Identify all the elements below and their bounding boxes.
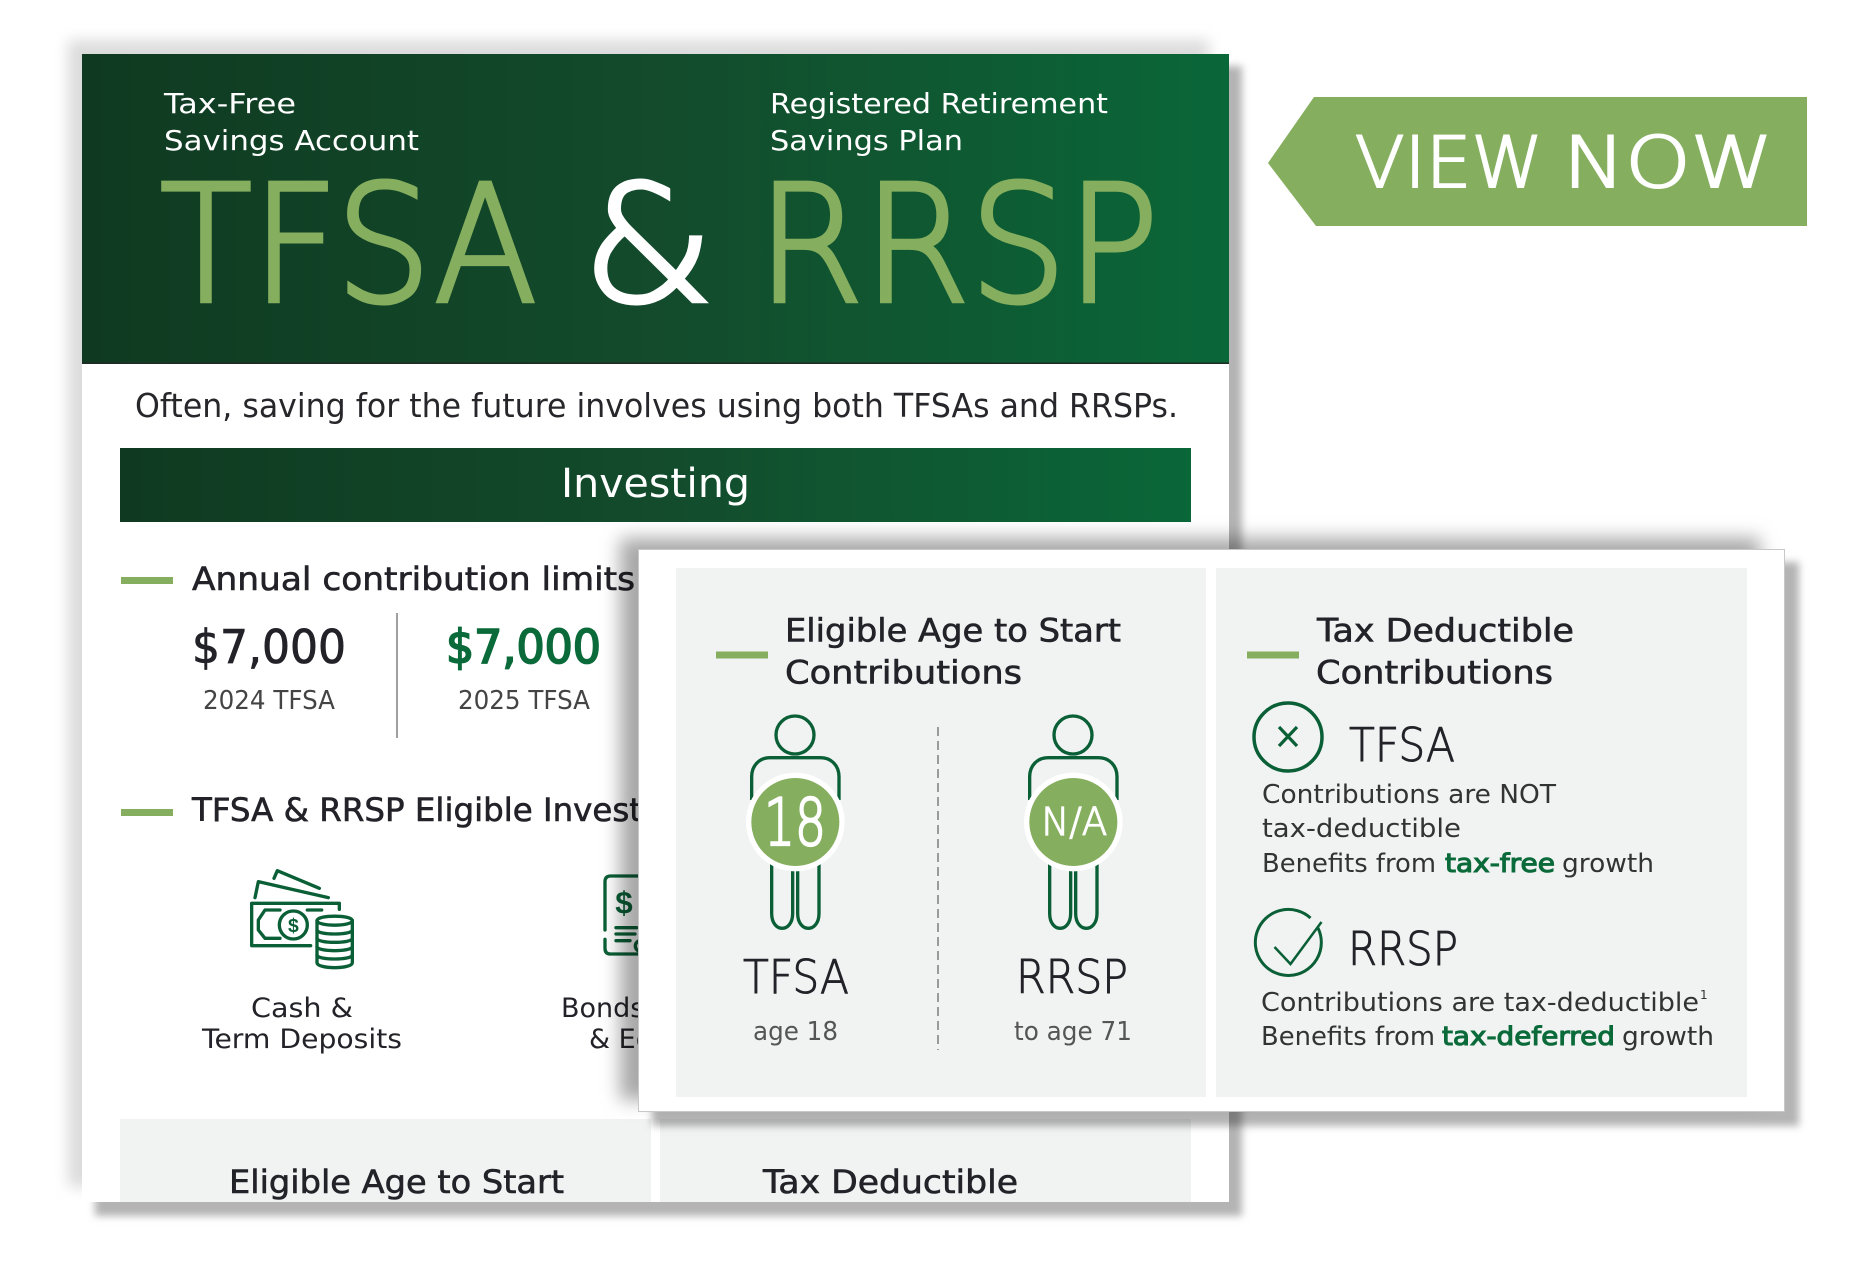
button: VIEW NOW <box>1268 97 1807 226</box>
label: Cash & Term Deposits: Term Deposits <box>201 1024 402 1055</box>
icon: cash and coins: $ <box>288 916 299 937</box>
icon: person with 18 badge <box>746 716 845 928</box>
icon: person with 18 badge: 18 <box>764 786 826 861</box>
subtitle: Tax-Free Savings Account: Tax-Free <box>163 87 296 120</box>
text: TFSA not deductible: tax-free <box>1445 849 1555 879</box>
label: TFSA age 18: age 18 <box>753 1017 838 1047</box>
text: RRSP deductible: Benefits from <box>1261 1022 1435 1052</box>
panel: lower tax deductible strip <box>660 1119 1191 1202</box>
subtitle: Registered Retirement Savings Plan: Registered Retirement <box>770 87 1108 120</box>
subtitle: Registered Retirement Savings Plan: Savings Plan <box>770 124 963 157</box>
panel: enlarged overlay card <box>620 538 1799 1126</box>
text: RRSP deductible: tax-deferred <box>1442 1022 1615 1052</box>
text: TFSA not deductible: growth <box>1562 849 1654 879</box>
panel: lower eligible age strip <box>120 1119 651 1202</box>
intro sentence: Often, saving for the future involves using both TFSAs and RRSPs. <box>135 386 1178 425</box>
text: TFSA not deductible: Benefits from <box>1262 849 1436 879</box>
panel: lower eligible age strip: Eligible Age to Start <box>229 1163 564 1201</box>
text: RRSP deductible: growth <box>1622 1022 1714 1052</box>
button: VIEW NOW: NOW <box>1563 122 1773 204</box>
label: RRSP to age 71 <box>1014 950 1132 1047</box>
title: TFSA & RRSP: & <box>582 152 714 340</box>
label: Cash & Term Deposits <box>201 993 402 1055</box>
icon: cross in circle <box>1254 703 1322 771</box>
icon: person with N/A badge <box>1024 716 1123 928</box>
stat: 2024 TFSA limit: $7,000 <box>192 620 346 674</box>
text: RRSP deductible <box>1261 922 1714 1052</box>
icon: bonds document: $ <box>615 885 633 920</box>
heading: Tax Deductible: Contributions <box>1316 654 1553 692</box>
label: Bonds & Equities <box>561 993 726 1055</box>
header banner <box>82 54 1229 364</box>
subtitle: Tax-Free Savings Account <box>163 87 419 157</box>
subtitle: Registered Retirement Savings Plan <box>770 87 1108 157</box>
panel: lower tax deductible strip: Tax Deductible <box>762 1163 1018 1201</box>
heading: Eligible Age: Contributions <box>785 654 1022 692</box>
text: RRSP deductible: 1 <box>1700 988 1708 1002</box>
icon: check in circle <box>1255 909 1322 975</box>
text: RRSP deductible: RRSP <box>1348 922 1458 976</box>
title: TFSA & RRSP <box>160 152 1159 340</box>
section bar: Investing: Investing <box>561 461 750 507</box>
label: RRSP to age 71: RRSP <box>1016 950 1128 1004</box>
stat: 2024 TFSA limit <box>192 620 346 716</box>
stat: 2024 TFSA limit: 2024 TFSA <box>203 686 335 716</box>
stat: 2025 TFSA limit: 2025 TFSA <box>458 686 590 716</box>
heading: Eligible Age: Eligible Age to Start <box>785 612 1121 650</box>
icon: person with N/A badge: N/A <box>1041 800 1107 844</box>
text: RRSP deductible: Contributions are tax-deductible <box>1261 988 1699 1018</box>
label: RRSP to age 71: to age 71 <box>1014 1017 1132 1047</box>
icon: bonds document <box>605 876 653 954</box>
heading: Eligible Age <box>716 612 1121 692</box>
text: TFSA not deductible <box>1262 718 1654 879</box>
text: TFSA not deductible: Contributions are NOT <box>1262 780 1556 810</box>
heading: TFSA & RRSP Eligible Investments: TFSA & RRSP Eligible Invest <box>191 791 642 829</box>
title: TFSA & RRSP: TFSA <box>160 152 537 340</box>
stat: 2025 TFSA limit <box>446 620 601 716</box>
section bar: Investing <box>120 448 1191 522</box>
panel: background document card <box>68 40 1242 1216</box>
heading: Tax Deductible: Tax Deductible <box>1316 612 1574 650</box>
label: Bonds & Equities: Bonds <box>561 993 644 1024</box>
panel: Eligible Age to Start Contributions <box>676 568 1206 1097</box>
subtitle: Tax-Free Savings Account: Savings Account <box>164 124 419 157</box>
label: TFSA age 18: TFSA <box>743 950 849 1004</box>
panel: Tax Deductible Contributions <box>1216 568 1747 1097</box>
heading: Annual contribution limits: Annual contribution limits <box>192 560 635 598</box>
text: TFSA not deductible: TFSA <box>1349 718 1455 772</box>
text: TFSA not deductible: tax-deductible <box>1262 814 1461 844</box>
heading: Tax Deductible <box>1247 612 1574 692</box>
stat: 2025 TFSA limit: $7,000 <box>446 620 601 674</box>
label: Bonds & Equities: & Equities <box>589 1024 726 1055</box>
icon: cash and coins <box>252 871 352 968</box>
label: TFSA age 18 <box>743 950 849 1047</box>
title: TFSA & RRSP: RRSP <box>757 152 1159 340</box>
button: VIEW NOW: VIEW <box>1355 122 1543 204</box>
label: Cash & Term Deposits: Cash & <box>251 993 353 1024</box>
